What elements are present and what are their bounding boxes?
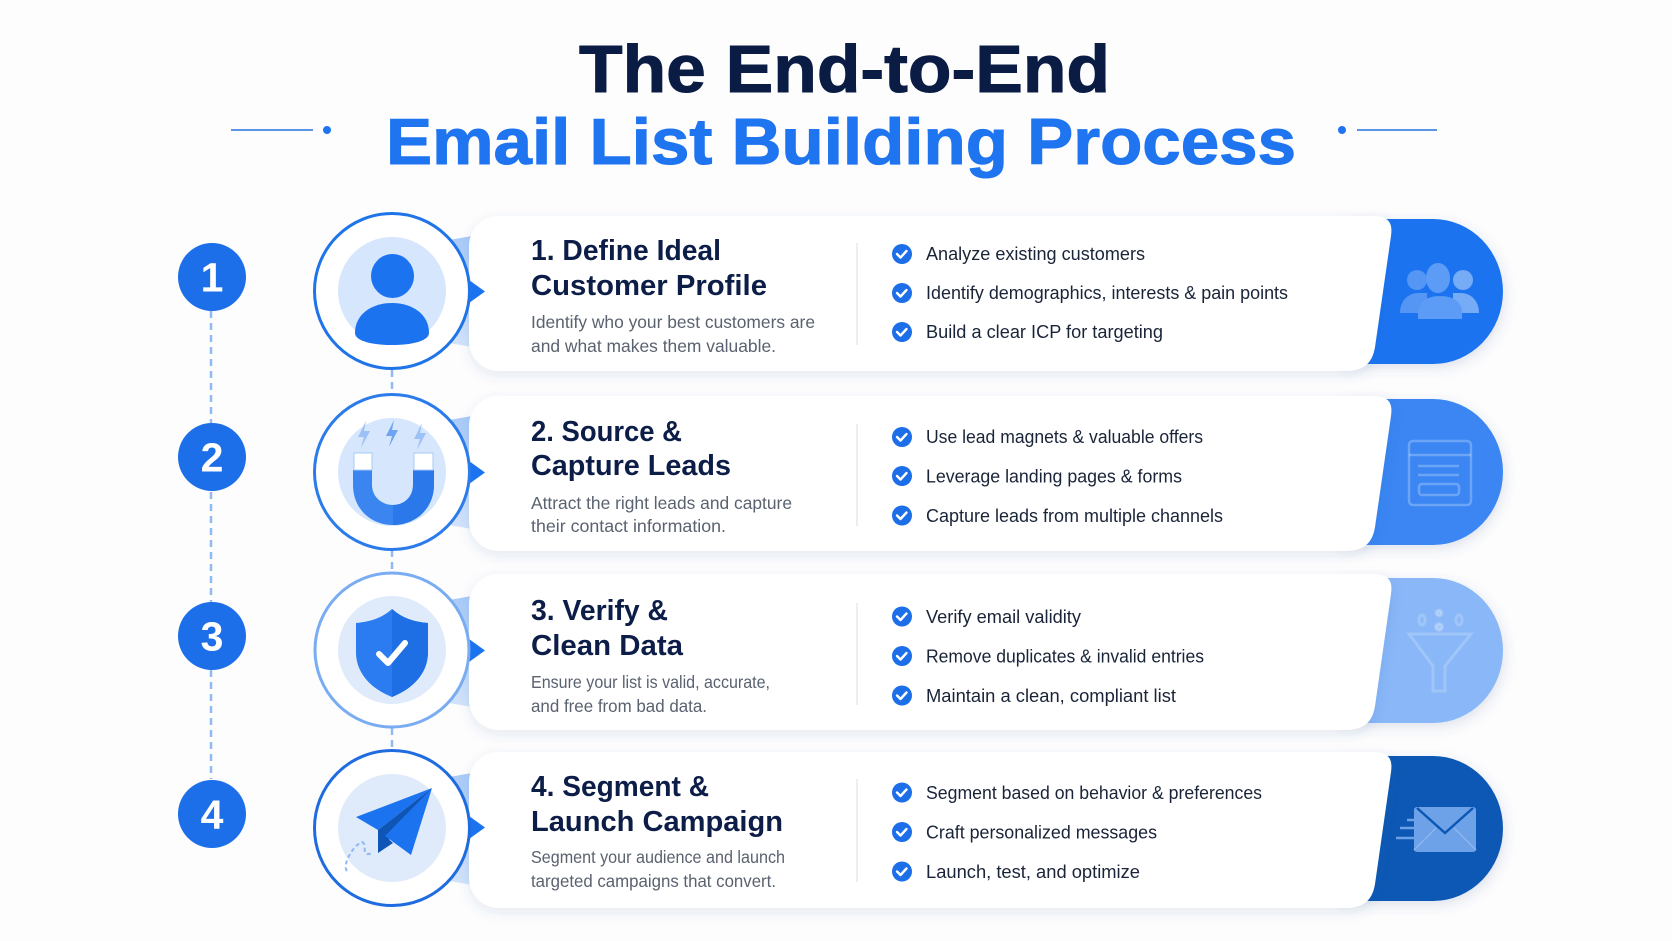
text: step 2 description xyxy=(531,493,792,536)
accent tab 4 xyxy=(1340,756,1503,901)
text: step 1 description: and what makes them valuable. xyxy=(531,336,776,356)
step 1 row xyxy=(178,214,1503,371)
wedge 4 xyxy=(449,773,472,885)
card 3 xyxy=(469,574,1391,730)
icon circle: paper plane xyxy=(314,750,470,906)
checklist 4: Segment based on behavior & preferences xyxy=(926,783,1262,803)
checklist 2: Use lead magnets & valuable offers xyxy=(926,427,1203,447)
text: step 2 heading: 2. Source & xyxy=(531,416,682,448)
arrow 2 xyxy=(469,461,485,484)
arrow 3 xyxy=(469,639,485,662)
text: step 4 heading: 4. Segment & xyxy=(531,771,709,803)
title decoration right xyxy=(1338,126,1437,134)
checklist 4: Launch, test, and optimize xyxy=(926,862,1140,882)
checklist 3: Maintain a clean, compliant list xyxy=(926,686,1176,706)
checklist 2: Capture leads from multiple channels xyxy=(926,506,1223,526)
text: step 4 description: targeted campaigns that convert. xyxy=(531,871,776,891)
text: step 1 description xyxy=(531,312,815,356)
text: step 3 description: Ensure your list is valid, accurate, xyxy=(531,672,770,692)
title: Email List Building Process xyxy=(386,105,1296,178)
wedge 3 xyxy=(449,596,472,707)
accent tab 1 xyxy=(1340,219,1503,364)
wedge 1 xyxy=(449,236,472,347)
step number 2 xyxy=(178,423,246,491)
icon circle: person xyxy=(314,214,470,368)
text: step 4 heading: Launch Campaign xyxy=(531,806,783,838)
text: step 2 description: Attract the right leads and capture xyxy=(531,493,792,513)
step number 1: 1 xyxy=(201,254,223,300)
step number 4 xyxy=(178,780,246,848)
timeline connector xyxy=(211,311,392,779)
text: step 3 heading xyxy=(531,595,684,662)
title xyxy=(386,32,1296,178)
text: step 3 description: and free from bad data. xyxy=(531,696,707,716)
accent tab 3 xyxy=(1340,578,1503,723)
checklist 1: Analyze existing customers xyxy=(926,244,1145,264)
step number 3 xyxy=(178,602,246,670)
icon: form window xyxy=(1409,441,1471,505)
step 3 row xyxy=(178,573,1503,730)
step number 4: 4 xyxy=(201,792,224,838)
title decoration left xyxy=(231,126,331,134)
text: step 2 heading xyxy=(531,416,731,482)
text: step 4 description xyxy=(531,847,785,891)
text: step 4 description: Segment your audience and launch xyxy=(531,847,785,867)
text: step 1 heading: Customer Profile xyxy=(531,270,767,302)
text: step 1 heading xyxy=(531,235,767,302)
text: step 3 heading: Clean Data xyxy=(531,630,684,662)
checklist 1: Identify demographics, interests & pain points xyxy=(926,283,1288,303)
text: step 1 description: Identify who your best customers are xyxy=(531,312,815,332)
card 4 xyxy=(469,752,1391,908)
step number 3: 3 xyxy=(201,614,223,660)
text: step 2 description: their contact information. xyxy=(531,516,726,536)
card 1 xyxy=(469,216,1391,371)
card 2 xyxy=(469,396,1391,551)
checklist 2 xyxy=(892,427,1223,526)
icon: funnel xyxy=(1409,610,1471,691)
arrow 4 xyxy=(469,816,485,839)
checklist 3: Remove duplicates & invalid entries xyxy=(926,646,1204,666)
checklist 3 xyxy=(892,606,1204,706)
icon: envelope xyxy=(1396,807,1476,852)
accent tab 2 xyxy=(1340,399,1503,545)
wedge 2 xyxy=(449,416,472,529)
text: step 4 heading xyxy=(531,771,783,838)
step 2 row xyxy=(178,394,1503,551)
text: step 3 heading: 3. Verify & xyxy=(531,595,668,627)
text: step 3 description xyxy=(531,672,770,716)
step number 1 xyxy=(178,243,246,311)
checklist 1: Build a clear ICP for targeting xyxy=(926,322,1163,342)
icon circle: magnet xyxy=(314,394,470,550)
checklist 4 xyxy=(892,782,1262,882)
step 4 row xyxy=(178,750,1503,908)
title: The End-to-End xyxy=(579,32,1110,107)
text: step 1 heading: 1. Define Ideal xyxy=(531,235,721,267)
text: step 2 heading: Capture Leads xyxy=(531,450,731,482)
icon circle: shield xyxy=(315,573,469,727)
checklist 1 xyxy=(892,244,1288,342)
checklist 4: Craft personalized messages xyxy=(926,822,1157,842)
checklist 3: Verify email validity xyxy=(926,607,1081,627)
step number 2: 2 xyxy=(201,434,223,480)
checklist 2: Leverage landing pages & forms xyxy=(926,466,1182,486)
icon: people xyxy=(1400,263,1479,319)
arrow 1 xyxy=(469,280,485,303)
